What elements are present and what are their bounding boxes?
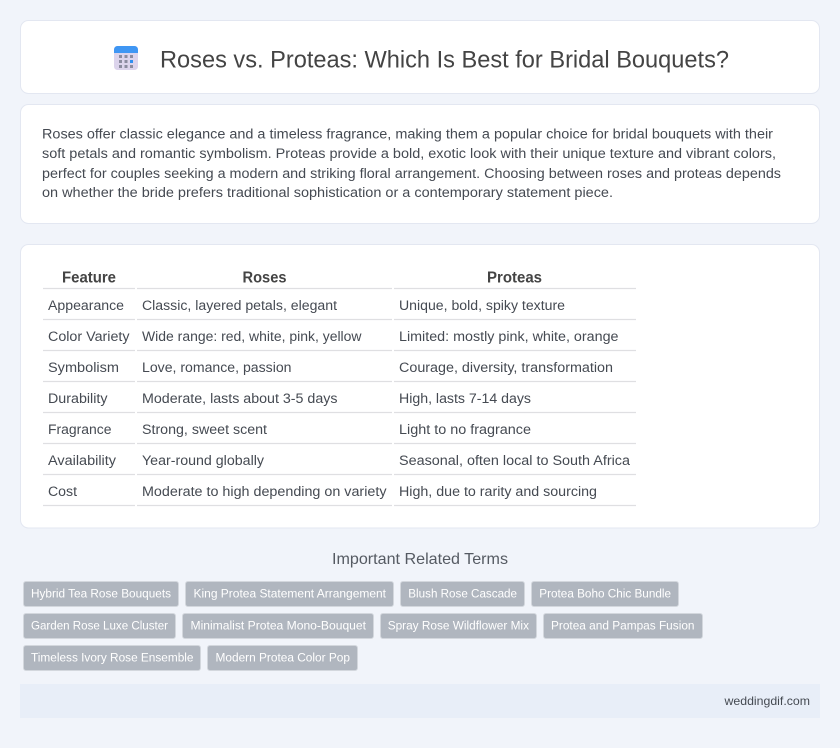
tag: Garden Rose Luxe Cluster <box>31 619 168 633</box>
table row: appearance: Unique, bold, spiky texture <box>399 298 565 314</box>
table header: Feature <box>62 270 116 286</box>
tag: Protea Boho Chic Bundle <box>539 587 671 601</box>
text block: introduction paragraph: on whether the bride prefers traditional sophistication or a contemporary statement piece. <box>42 185 613 201</box>
tag: Protea and Pampas Fusion <box>551 619 695 633</box>
tag: Modern Protea Color Pop <box>216 651 350 665</box>
icon: calendar <box>114 46 138 70</box>
table row: availability: Availability <box>48 453 117 469</box>
table row: symbolism: Symbolism <box>48 360 119 376</box>
tag: Blush Rose Cascade <box>408 587 517 601</box>
table row: durability: Moderate, lasts about 3-5 days <box>142 391 338 407</box>
table row: color variety: Color Variety <box>48 329 130 345</box>
panel: title header <box>20 20 820 94</box>
title: Roses vs. Proteas: Which Is Best for Bridal Bouquets? <box>160 46 729 74</box>
table row: fragrance: Strong, sweet scent <box>142 422 267 438</box>
tag <box>380 614 536 638</box>
tag <box>24 614 176 638</box>
table row: cost: High, due to rarity and sourcing <box>399 484 597 500</box>
table row: symbolism: Courage, diversity, transformation <box>399 360 613 376</box>
table row: cost <box>48 484 597 500</box>
tag: Hybrid Tea Rose Bouquets <box>31 587 171 601</box>
tag: Minimalist Protea Mono-Bouquet <box>190 619 367 633</box>
tag: Spray Rose Wildflower Mix <box>388 619 530 633</box>
panel: related term tags <box>24 582 702 670</box>
tag <box>24 646 200 670</box>
tag <box>400 582 524 606</box>
text block: introduction paragraph: Roses offer classic elegance and a timeless fragrance, making them a popular choice for bridal bouquets with their <box>42 126 773 142</box>
text block: introduction paragraph: soft petals and romantic symbolism. Proteas provide a bold, exotic look with their unique texture and vibrant colors, <box>42 146 776 162</box>
table row: appearance: Appearance <box>48 298 124 314</box>
table row: symbolism: Love, romance, passion <box>142 360 292 376</box>
table row: fragrance: Fragrance <box>48 422 112 438</box>
table row: availability <box>48 453 630 469</box>
table row: durability <box>48 391 531 407</box>
tag <box>24 582 178 606</box>
tag <box>186 582 394 606</box>
table row: availability: Seasonal, often local to South Africa <box>399 453 630 469</box>
table row: durability: Durability <box>48 391 108 407</box>
table row: cost: Moderate to high depending on variety <box>142 484 387 500</box>
table row: appearance <box>48 298 565 314</box>
table row: color variety <box>48 329 619 345</box>
table row: color variety: Wide range: red, white, pink, yellow <box>142 329 362 345</box>
tag <box>532 582 678 606</box>
tag <box>182 614 374 638</box>
table row: color variety: Limited: mostly pink, white, orange <box>399 329 619 345</box>
footer <box>20 684 820 718</box>
table header: Roses <box>242 270 287 286</box>
tag: Timeless Ivory Rose Ensemble <box>31 651 194 665</box>
table row: symbolism <box>48 360 613 376</box>
heading: related terms: Important Related Terms <box>332 551 508 568</box>
table row: fragrance <box>48 422 531 438</box>
table row: durability: High, lasts 7-14 days <box>399 391 531 407</box>
table header <box>62 270 542 286</box>
table row: cost: Cost <box>48 484 77 500</box>
table header: Proteas <box>487 270 542 286</box>
panel: comparison table <box>20 244 820 528</box>
tag <box>208 646 358 670</box>
table row: fragrance: Light to no fragrance <box>399 422 531 438</box>
tag <box>544 614 702 638</box>
table row: availability: Year-round globally <box>142 453 265 469</box>
text block: introduction paragraph <box>42 126 781 201</box>
text block: introduction paragraph: perfect for couples seeking a modern and striking floral arrangement. Choosing between roses and proteas depends <box>42 166 781 182</box>
footer source: weddingdif.com <box>723 694 810 708</box>
tag: King Protea Statement Arrangement <box>194 587 387 601</box>
table row: appearance: Classic, layered petals, elegant <box>142 298 337 314</box>
panel: introduction <box>20 104 820 224</box>
